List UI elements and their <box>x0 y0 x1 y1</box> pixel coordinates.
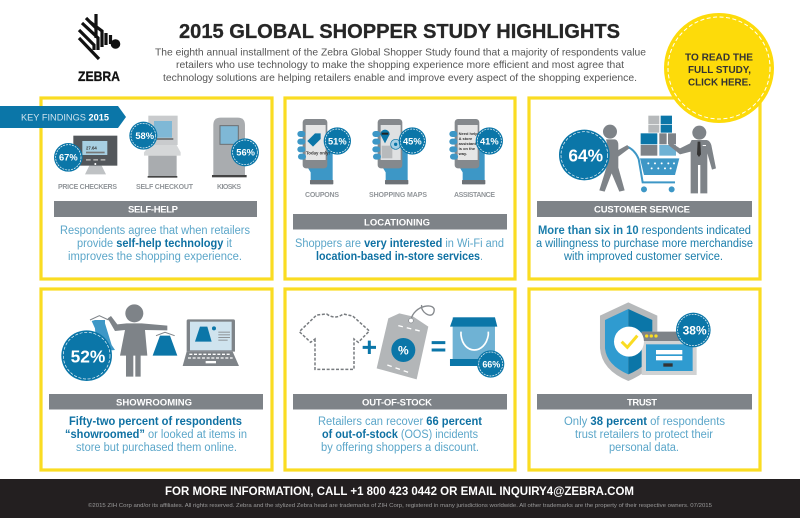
icon: shopper with clothes and laptop: 52% <box>71 346 105 366</box>
icon: price checker: 67% <box>59 153 78 163</box>
footer contact line: FOR MORE INFORMATION, CALL +1 800 423 0442 OR EMAIL INQUIRY4@ZEBRA.COM <box>165 484 634 498</box>
icon: phone coupons: Today only! <box>306 150 331 155</box>
heading: self-help: SELF-HELP <box>128 204 179 216</box>
text block: trust: trust retailers to protect their <box>575 429 713 441</box>
text block: locationing <box>295 238 504 263</box>
heading: out-of-stock <box>293 394 507 410</box>
icon: phone coupons <box>297 119 351 184</box>
intro paragraph: technology solutions are helping retailers enable and improve every aspect of the shopping experience. <box>163 72 637 84</box>
text block: customer service: with improved customer service. <box>563 251 723 263</box>
title: 2015 GLOBAL SHOPPER STUDY HIGHLIGHTS <box>179 21 620 43</box>
label: shopping maps: SHOPPING MAPS <box>369 192 427 199</box>
icon: phone assistance: way. <box>458 151 467 156</box>
icon: phone assistance: assistant <box>459 141 477 146</box>
icon: shopper, cart and associate <box>559 116 716 193</box>
icon: kiosk <box>212 118 259 177</box>
label: kiosks: KIOSKS <box>217 184 241 191</box>
text block: locationing: Shoppers are very interested in Wi-Fi and <box>295 238 504 250</box>
icon: shopper with clothes and laptop <box>61 304 239 381</box>
text block: self-help: provide self-help technology it <box>77 238 233 250</box>
icon: self checkout <box>129 116 181 178</box>
text block: showrooming <box>65 416 247 454</box>
intro paragraph <box>155 46 646 84</box>
panel: showrooming <box>41 289 272 470</box>
icon: phone shopping maps <box>372 119 426 184</box>
icon: shield and login window <box>600 302 711 381</box>
text block: trust <box>564 416 725 454</box>
callout: read the full study: TO READ THE <box>685 52 753 64</box>
footer <box>0 479 800 518</box>
text block: customer service: a willingness to purchase more merchandise <box>536 238 753 250</box>
panel: trust <box>529 289 760 470</box>
banner: key findings: KEY FINDINGS 2015 <box>21 112 110 124</box>
heading: trust <box>537 394 752 410</box>
icon: t-shirt, discount tag and bag: % <box>398 343 409 357</box>
callout: read the full study: CLICK HERE. <box>688 76 751 88</box>
text block: showrooming: “showroomed” or looked at items in <box>65 429 247 441</box>
text block: showrooming: Fifty-two percent of respondents <box>69 416 242 428</box>
icon: phone assistance <box>449 119 503 184</box>
callout: read the full study <box>664 13 774 123</box>
text block: self-help: improves the shopping experience. <box>68 251 242 263</box>
heading: locationing <box>293 214 507 230</box>
icon: phone shopping maps: 45% <box>403 136 422 146</box>
heading: showrooming <box>49 394 263 410</box>
text block: locationing: location-based in-store services. <box>316 251 483 263</box>
heading: customer service <box>537 201 752 217</box>
panel: self-help <box>41 98 272 279</box>
panel: out-of-stock <box>285 289 515 470</box>
heading: self-help <box>54 201 257 217</box>
panel: locationing <box>285 98 515 279</box>
label: price checkers: PRICE CHECKERS <box>58 184 117 191</box>
text block: trust: personal data. <box>609 442 679 454</box>
callout: read the full study: FULL STUDY, <box>688 64 751 76</box>
text block: customer service: More than six in 10 respondents indicated <box>538 225 751 237</box>
icon: t-shirt, discount tag and bag <box>299 305 504 379</box>
text block: self-help <box>60 225 250 263</box>
panel: customer service <box>529 98 760 279</box>
heading: customer service: CUSTOMER SERVICE <box>594 204 690 216</box>
heading: locationing: LOCATIONING <box>364 218 430 228</box>
icon: Zebra logo: ZEBRA <box>78 68 120 84</box>
label: coupons: COUPONS <box>305 192 339 199</box>
text block: out-of-stock: Retailers can recover 66 percent <box>318 416 482 428</box>
icon: phone coupons: 51% <box>328 136 347 146</box>
icon: price checker: 27.64 <box>86 146 97 151</box>
text block: out-of-stock <box>318 416 482 454</box>
icon: shopper, cart and associate: 64% <box>568 146 603 166</box>
icon: kiosk: 56% <box>236 148 256 158</box>
text block: out-of-stock: of out-of-stock (OOS) incidents <box>322 429 478 441</box>
heading: out-of-stock: OUT-OF-STOCK <box>362 398 432 408</box>
label: self checkout: SELF CHECKOUT <box>136 184 194 191</box>
text block: self-help: Respondents agree that when retailers <box>60 225 250 237</box>
heading: showrooming: SHOWROOMING <box>116 398 192 408</box>
icon: phone assistance: is on the <box>459 146 476 151</box>
intro paragraph: The eighth annual installment of the Zebra Global Shopper Study found that a majority of respondents value <box>155 46 646 58</box>
text block: customer service <box>536 225 753 263</box>
intro paragraph: retailers who use technology to make the shopping experience more efficient and most agree that <box>176 59 624 71</box>
icon: phone assistance: A store <box>459 136 473 141</box>
icon: shield and login window: 38% <box>683 323 707 337</box>
text block: out-of-stock: by offering shoppers a discount. <box>321 442 479 454</box>
icon: price checker <box>54 136 117 174</box>
heading: trust: TRUST <box>627 398 657 408</box>
label: assistance: ASSISTANCE <box>454 192 495 199</box>
footer legal line: ©2015 ZIH Corp and/or its affiliates. All rights reserved. Zebra and the stylized Zebra head are trademarks of ZIH Corp, registered in many jurisdictions worldwide. All other trademarks are the property of their respective owners. 07/2015 <box>88 502 712 509</box>
text block: trust: Only 38 percent of respondents <box>564 416 725 428</box>
icon: phone assistance: 41% <box>480 136 499 146</box>
icon: self checkout: 58% <box>135 131 155 141</box>
icon: t-shirt, discount tag and bag: 66% <box>482 359 500 369</box>
icon: Zebra logo <box>78 14 120 84</box>
icon: phone assistance: Need help? <box>459 131 481 136</box>
text block: showrooming: store but purchased them online. <box>76 442 237 454</box>
banner: key findings <box>0 106 126 128</box>
